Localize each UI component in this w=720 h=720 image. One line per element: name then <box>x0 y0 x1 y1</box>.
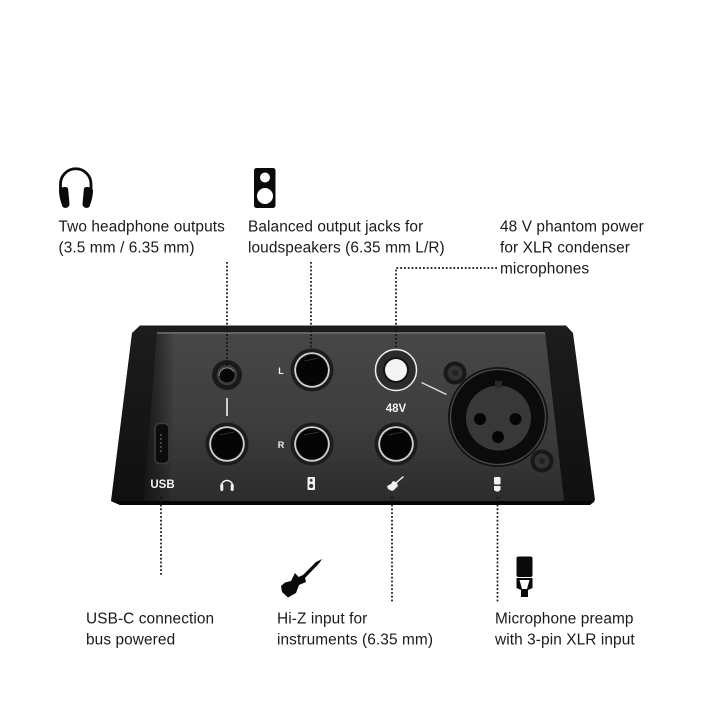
icon: headphones <box>59 169 93 208</box>
caption: Hi-Z input: instruments (6.35 mm) <box>277 632 433 648</box>
icon: small microphone <box>494 477 500 492</box>
device body <box>111 326 595 505</box>
R label: R <box>278 440 285 450</box>
dotted leader: microphone <box>496 497 498 602</box>
dotted leader: outputs <box>310 262 312 349</box>
caption: phantom power: for XLR condenser <box>500 240 630 256</box>
XLR input <box>448 367 548 467</box>
front face panel <box>144 332 564 501</box>
headphone mini jack 3.5 mm <box>212 360 242 390</box>
icon: speaker <box>254 168 276 208</box>
link bar between headphone jacks <box>226 398 228 416</box>
device: audio interface back panel <box>111 326 595 505</box>
caption: USB-C: USB-C connection <box>86 610 214 628</box>
screw top <box>444 362 466 384</box>
caption: Hi-Z input: Hi-Z input for <box>277 610 367 628</box>
caption: phantom power: microphones <box>500 260 589 278</box>
caption: output jacks: loudspeakers (6.35 mm L/R) <box>248 240 445 256</box>
dotted leader: USB <box>160 497 162 575</box>
caption: USB-C: bus powered <box>86 632 175 648</box>
48V button <box>376 350 416 390</box>
screw bottom <box>530 450 554 472</box>
caption: phantom power: 48 V phantom power <box>500 218 644 236</box>
dotted leader: headphones <box>226 262 228 366</box>
caption: headphone outputs: Two headphone outputs <box>58 218 225 236</box>
caption: headphone outputs: (3.5 mm / 6.35 mm) <box>58 240 195 256</box>
caption: microphone preamp: Microphone preamp <box>495 610 634 628</box>
USB-C port <box>155 424 169 464</box>
output jack R <box>290 422 334 466</box>
instrument jack <box>374 422 418 466</box>
USB label: USB <box>150 479 175 491</box>
icon: small headphones <box>220 481 234 491</box>
caption: microphone preamp: with 3-pin XLR input <box>494 632 635 648</box>
icon: small guitar <box>387 476 404 491</box>
icon: guitar <box>281 559 322 598</box>
headphone jack 6.35 mm <box>206 422 248 466</box>
48V label: 48V <box>386 403 407 415</box>
output jack L <box>290 348 334 392</box>
icon: microphone <box>516 556 532 597</box>
icon: small speaker <box>308 477 315 490</box>
L label: L <box>278 366 284 376</box>
caption: output jacks: Balanced output jacks for <box>248 218 423 236</box>
dotted leader: instrument <box>391 497 393 602</box>
dotted leader: 48V <box>396 268 497 349</box>
link line to XLR <box>422 382 446 394</box>
